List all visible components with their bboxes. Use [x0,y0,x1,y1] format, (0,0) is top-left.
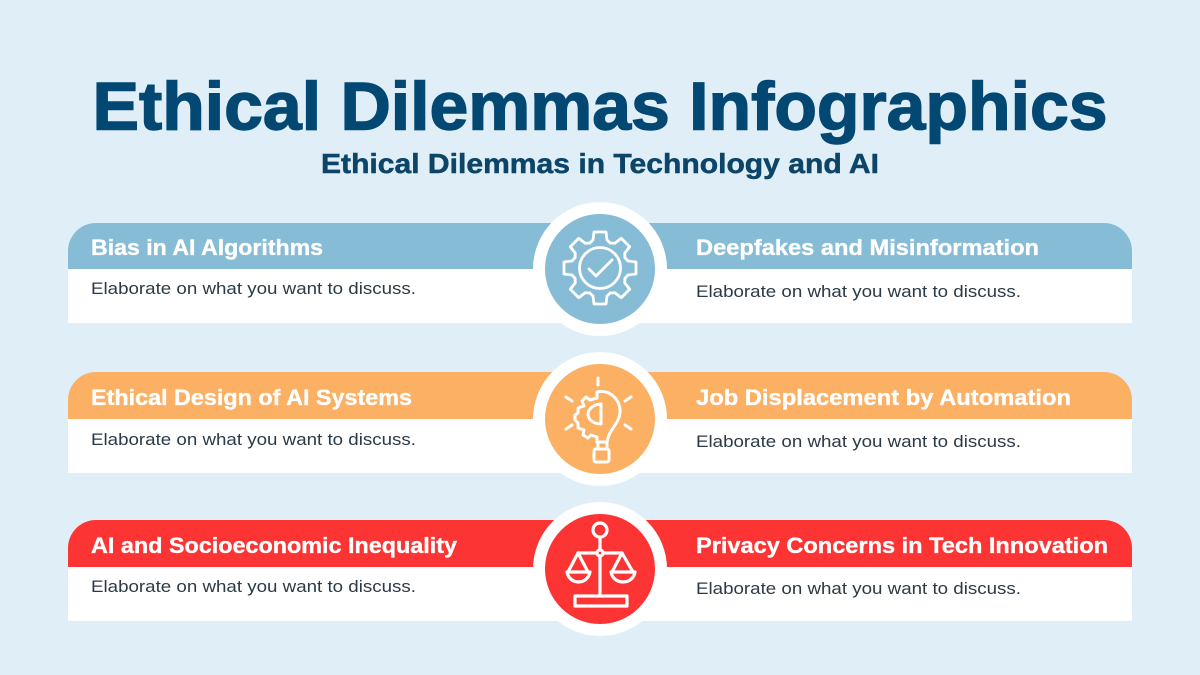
panel: row 1 [68,223,1132,323]
text: left description: Elaborate on what you want to discuss. [91,577,416,596]
icon: balance scale [533,502,667,636]
heading: Ethical Design of AI Systems: Ethical Design of AI Systems [91,385,412,410]
heading: Deepfakes and Misinformation: Deepfakes and Misinformation [696,235,1039,260]
text: left description: Elaborate on what you want to discuss. [91,279,416,298]
heading: AI and Socioeconomic Inequality: AI and Socioeconomic Inequality [91,533,458,558]
text: right description: Elaborate on what you want to discuss. [696,579,1021,598]
heading: Privacy Concerns in Tech Innovation: Privacy Concerns in Tech Innovation [696,533,1108,558]
heading: Bias in AI Algorithms: Bias in AI Algorithms [91,235,323,260]
panel: row 3 [68,520,1132,621]
subtitle: Ethical Dilemmas in Technology and AI [321,148,879,179]
icon: light bulb with gear [533,352,667,486]
panel: row 2 [68,372,1132,473]
text: right description: Elaborate on what you want to discuss. [696,432,1021,451]
heading: Job Displacement by Automation: Job Displacement by Automation [696,385,1071,410]
icon: gear with check [533,202,667,336]
text: right description: Elaborate on what you want to discuss. [696,282,1021,301]
title: Ethical Dilemmas Infographics [92,68,1108,144]
text: left description: Elaborate on what you want to discuss. [91,430,416,449]
